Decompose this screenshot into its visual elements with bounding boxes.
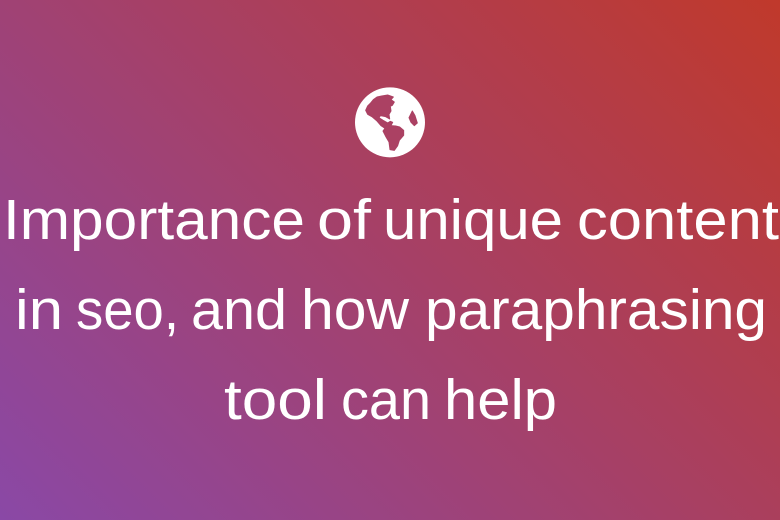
- icon: globe: [355, 87, 425, 157]
- title line 1: content: [577, 188, 779, 252]
- title line 3: [224, 368, 557, 432]
- title line 1: [3, 188, 779, 252]
- title line 1: unique: [383, 188, 563, 252]
- title line 2: in: [15, 278, 63, 342]
- title: [3, 188, 779, 432]
- title line 3: can: [341, 368, 431, 432]
- title line 3: help: [444, 368, 557, 432]
- title line 2: and: [191, 278, 287, 342]
- title line 2: seo,: [76, 278, 179, 342]
- title line 1: Importance: [3, 188, 305, 252]
- title line 2: how: [301, 278, 410, 342]
- title line 1: of: [317, 188, 371, 252]
- title line 3: tool: [224, 368, 327, 432]
- title line 2: paraphrasing: [425, 278, 767, 342]
- title line 2: [15, 278, 767, 342]
